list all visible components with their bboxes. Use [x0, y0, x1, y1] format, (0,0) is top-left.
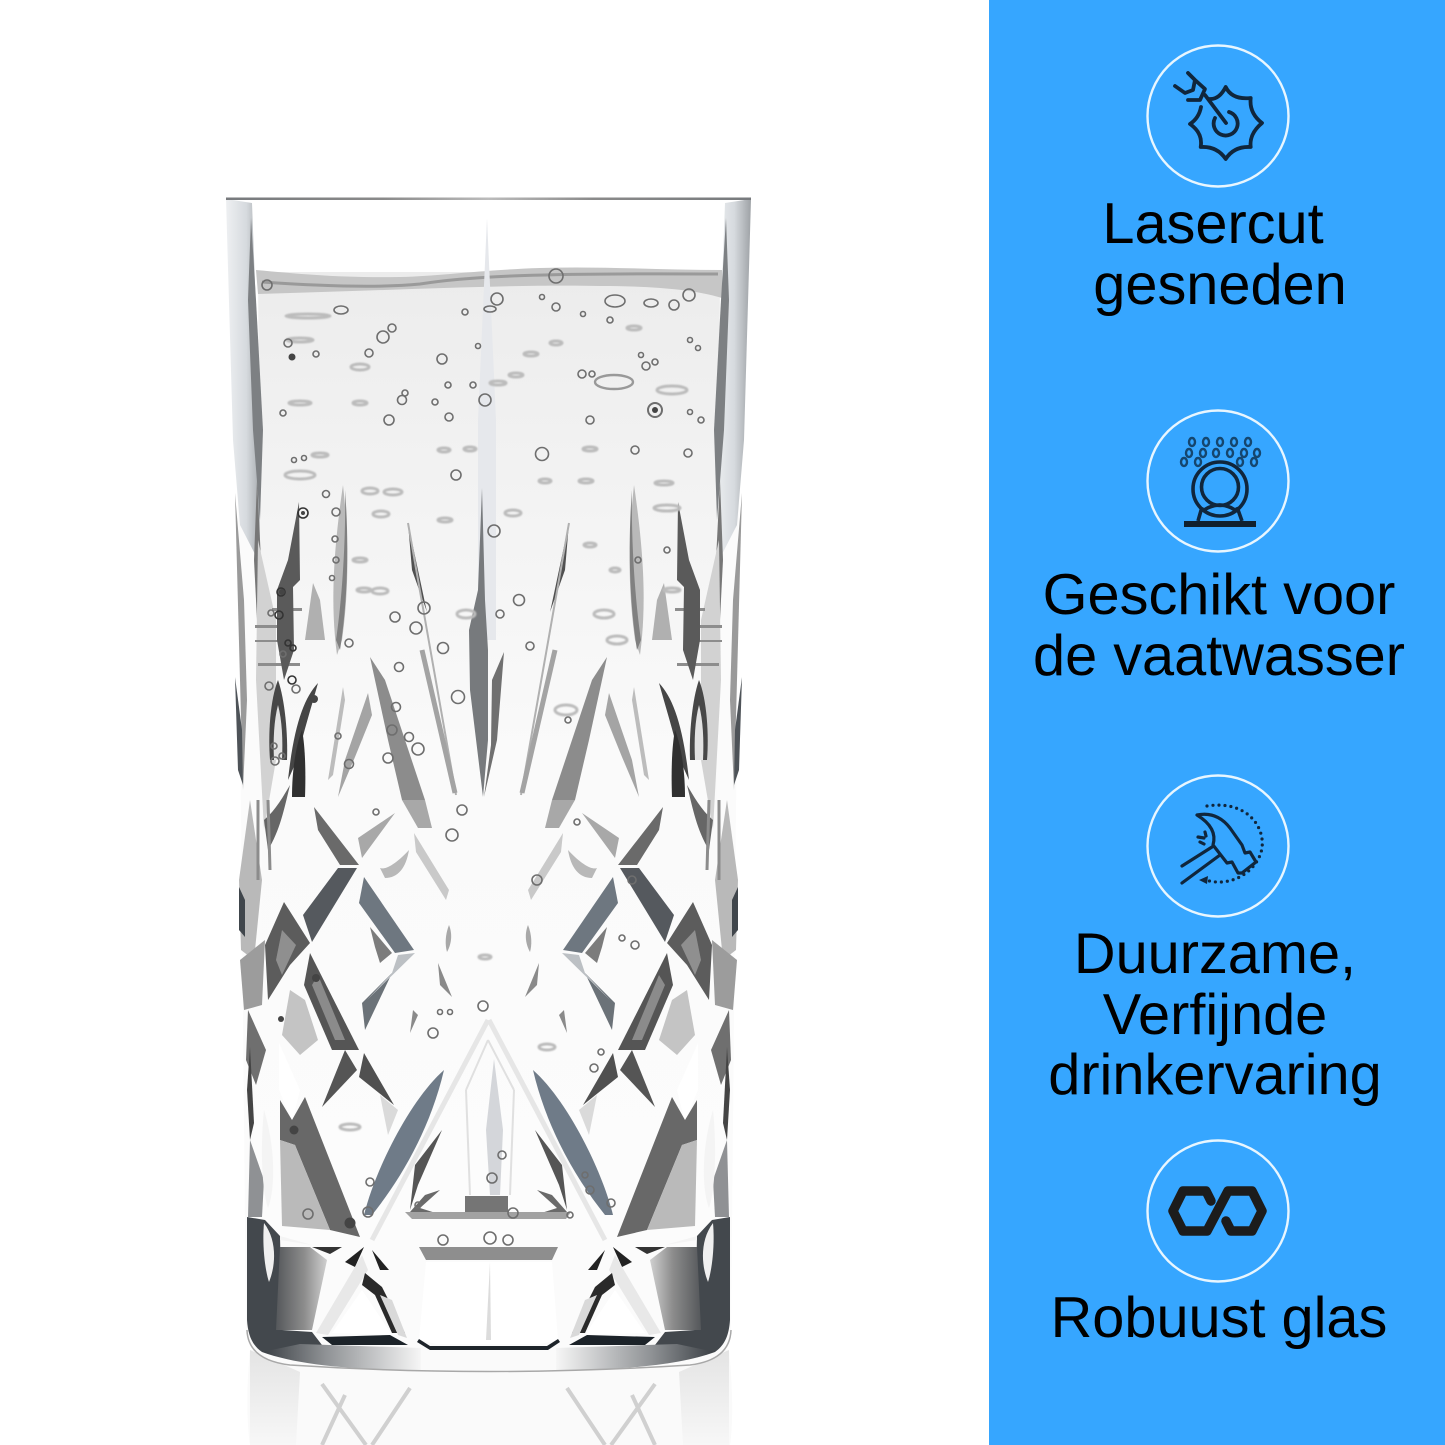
- water surface dark line: [262, 274, 718, 286]
- centre vertical highlight: [478, 218, 496, 640]
- water floor band: [419, 1247, 558, 1260]
- centre leaf: [469, 488, 488, 797]
- label: duurzame, verfijnde drinkervaring: Verfijnde: [1103, 983, 1327, 1047]
- icon: dishwasher plate: [1148, 410, 1288, 552]
- label: duurzame, verfijnde drinkervaring: [1048, 922, 1382, 1107]
- feature: lasercut: [1093, 46, 1347, 317]
- left half of cut pattern: [235, 218, 488, 1370]
- label: geschikt voor de vaatwasser: Geschikt voor: [1043, 563, 1395, 627]
- base cuts: [247, 1217, 421, 1370]
- label: duurzame, verfijnde drinkervaring: Duurzame,: [1074, 922, 1356, 986]
- lower centre spike outline: [466, 1040, 514, 1195]
- base dark line: [417, 1339, 560, 1350]
- base outline: [247, 1330, 731, 1372]
- central leaves: [370, 523, 456, 952]
- glass body: [238, 500, 739, 1372]
- label: robuust glas: Robuust glas: [1051, 1286, 1387, 1350]
- feature: robust glass: [1051, 1140, 1387, 1350]
- right half of cut pattern: [489, 218, 742, 1370]
- label: geschikt voor de vaatwasser: de vaatwasser: [1033, 624, 1405, 688]
- glass illustration: [226, 198, 751, 1445]
- water surface band: [256, 267, 722, 298]
- glass reflection: [247, 1350, 732, 1445]
- feature: durable: [1048, 776, 1382, 1107]
- dark bubbles: [278, 354, 658, 1228]
- blue feature panel: [989, 0, 1445, 1445]
- soft blurred bubbles: [285, 314, 687, 1130]
- left glass wall: [226, 199, 263, 560]
- icon: infinity hexagon: [1148, 1140, 1288, 1282]
- base clear centre: [419, 1262, 558, 1344]
- feature: dishwasher: [1033, 410, 1405, 688]
- centre side leaf: [484, 652, 504, 797]
- label: geschikt voor de vaatwasser: [1033, 563, 1405, 688]
- side spikes: [235, 218, 372, 960]
- rim: [226, 198, 751, 200]
- label: duurzame, verfijnde drinkervaring: drinkervaring: [1048, 1043, 1382, 1107]
- diamond cuts: [240, 807, 452, 1135]
- label: lasercut gesneden: [1093, 192, 1347, 317]
- label: lasercut gesneden: Lasercut: [1102, 192, 1324, 256]
- lower centre spike: [486, 1059, 503, 1195]
- base bottom edge: [421, 1350, 556, 1371]
- water bottom band: [405, 1212, 571, 1219]
- icon: laser cutting: [1148, 46, 1288, 186]
- water bottom block: [465, 1196, 508, 1213]
- label: lasercut gesneden: gesneden: [1093, 253, 1347, 317]
- right glass wall: [714, 199, 751, 560]
- bubbles: [262, 269, 704, 1245]
- icon: hammer: [1148, 776, 1288, 916]
- water: [250, 272, 728, 1240]
- lower petals: [247, 1020, 488, 1240]
- base centre sliver: [486, 1262, 491, 1340]
